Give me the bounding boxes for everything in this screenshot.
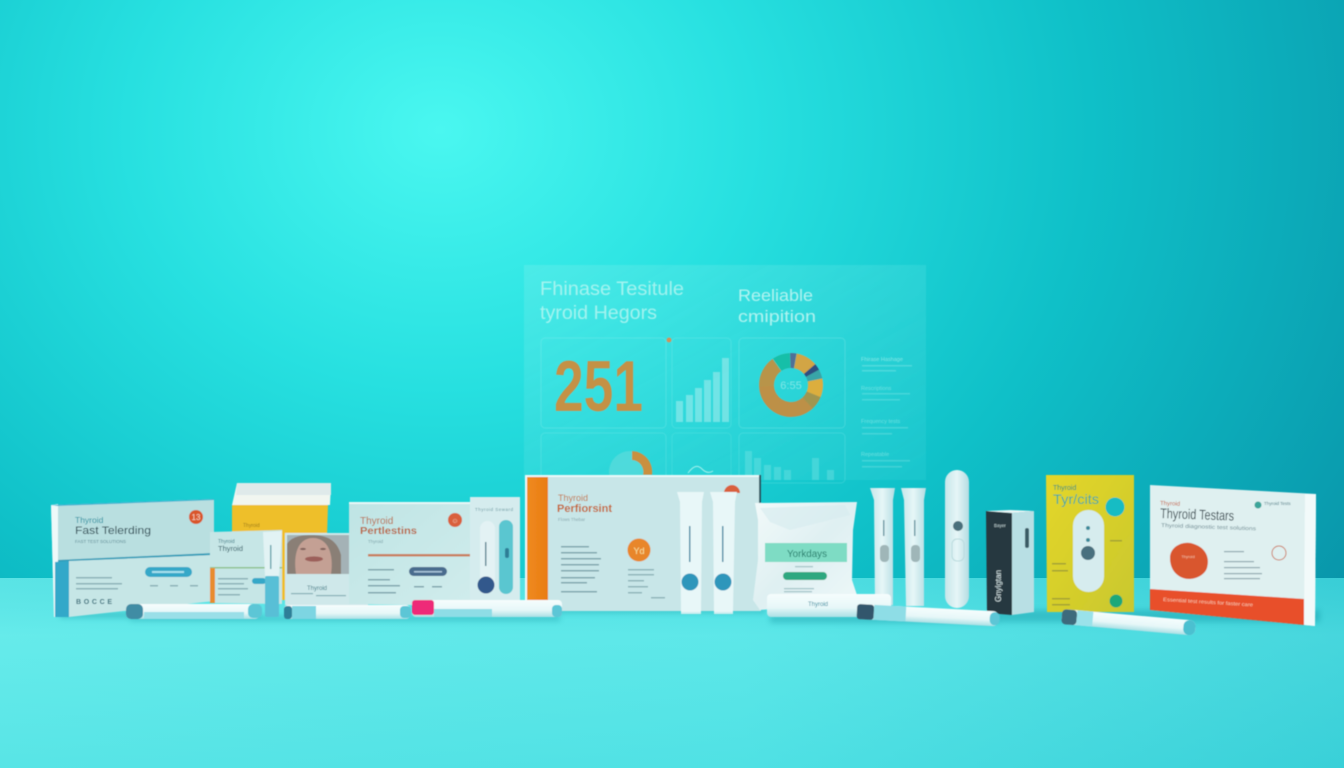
panel: translucent dashboard [524,265,926,493]
heading: left title: tyroid Hegors [540,303,657,324]
heading: left title [540,279,684,324]
box: Thyroid Testars: Thyroid [1160,501,1180,508]
floor [0,578,1344,768]
box: device card [470,497,520,602]
heading: right title [738,286,816,326]
tubes: pair on large box [677,492,737,614]
pens on the floor [126,594,1196,636]
box: Fast Telerding: Fast Telerding [75,525,151,537]
donut chart: 6:55 [780,380,802,392]
heading: left title: Fhinase Tesitule [540,279,684,300]
legend list: Repeatable [861,452,889,458]
legend list: Rescriptions [861,386,892,392]
dark box [986,510,1034,615]
photo: smiling face [287,535,365,574]
dark box: Gnylgtan [994,570,1003,602]
heading: right title: cmipition [738,307,816,326]
background wall [0,0,1344,579]
pouch: Yorkdays [753,502,858,610]
legend list: Frequency tests [861,419,900,425]
box: Thyroid Testars: Thyroid Tests [1264,501,1291,506]
box: Fast Telerding: FAST TEST SOLUTIONS [75,539,126,544]
pen 4: Thyroid [808,602,828,608]
box: small Thyroid kit [210,530,282,604]
box: Fast Telerding: Thyroid [75,515,104,525]
box: Thyroid Testars: Thyroid Testars [1160,505,1234,524]
donut chart [739,338,845,428]
pen 4 [767,594,891,617]
yellow box: Thyroid kits [1046,475,1134,612]
tube: upright left [263,531,282,617]
legend list [861,357,912,468]
box: Thyroid Pertlestins: ☺ [451,518,459,525]
box: Fast Telerding: BOCCE [76,599,112,606]
box: Thyroid Pertlestins: Pertlestins [360,526,417,537]
products row [51,470,1316,636]
box: Thyroid Perfiorsint: Thyroid [558,493,588,503]
dark box: Bayer [994,523,1006,528]
yellow box: Thyroid kits: Thyroid [1053,485,1076,492]
pen 2 [284,605,411,619]
box: Thyroid Pertlestins [349,502,470,606]
test strips [870,488,926,606]
box: Thyroid Testars: Essential test results for faster care [1163,597,1253,609]
box: portrait card [285,533,368,605]
bar chart [672,338,731,428]
box: Thyroid Pertlestins: Thyroid [368,539,384,544]
box: Thyroid Perfiorsint [525,475,761,611]
box: Thyroid Perfiorsint: Perfiorsint [557,503,612,515]
card: big number: 251 [554,347,643,427]
pen 1 [126,604,262,619]
box: device card: Thyroid Seward [475,507,513,512]
box: portrait card: Thyroid [307,586,327,592]
heading: right title: Reeliable [738,286,813,305]
legend list: Fhirase Hashage [861,357,903,363]
box: Thyroid Testars: Thyroid diagnostic test solutions [1161,523,1256,532]
box: small Thyroid kit: Thyroid [218,539,235,545]
box: Fast Telerding: 13 [192,513,201,522]
pen 3 [412,600,562,617]
box: Thyroid Pertlestins: Thyroid [360,516,393,527]
pouch: Yorkdays: Yorkdays [787,549,827,560]
box: small Thyroid kit: Thyroid [218,544,243,553]
pen 5 [857,604,1000,626]
pen 6 [1061,609,1196,636]
product shadows [60,608,1320,623]
test device [945,470,969,608]
box: Thyroid Perfiorsint: Flows Thebar [558,517,586,522]
box: Thyroid Testars [1150,485,1316,626]
lower chart cards [541,433,845,493]
box: Thyroid Testars: Thyroid [1181,554,1195,559]
yellow box: Thyroid kits: Tyr/cits [1053,491,1099,507]
box: yellow pack: Thyroid [243,523,260,529]
box: Thyroid Perfiorsint: Yd [633,546,645,556]
box: yellow pack [232,483,331,600]
box: Fast Telerding [51,499,214,617]
